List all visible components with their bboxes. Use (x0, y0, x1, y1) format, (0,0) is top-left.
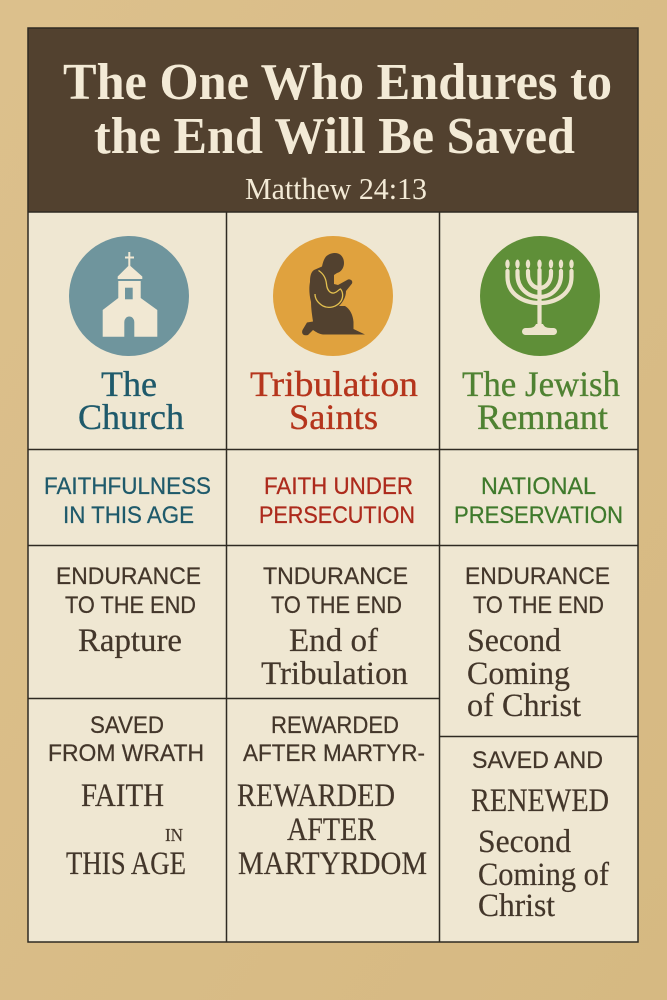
cell: jewish remnant outcome: Coming of (478, 857, 609, 893)
header panel (28, 28, 638, 212)
cell: church outcome (48, 712, 204, 882)
cell: church outcome: FROM WRATH (48, 740, 204, 767)
cell: tribulation saints endurance: TNDURANCE (263, 563, 408, 590)
cell: jewish remnant endurance: TO THE END (473, 592, 604, 619)
group name: The (101, 364, 157, 404)
cell: church outcome: IN (165, 825, 183, 845)
subtitle: scripture reference: Matthew 24:13 (245, 171, 427, 206)
group name: Church (78, 397, 184, 437)
cell: jewish remnant endurance: Second (467, 623, 561, 659)
cell: church outcome: SAVED (90, 712, 164, 739)
cell: jewish remnant outcome: Second (478, 824, 571, 860)
group name: The Jewish (462, 364, 620, 404)
label: faithfulness in this age (44, 473, 211, 529)
cell: tribulation saints endurance: TO THE END (271, 592, 402, 619)
cell: tribulation saints endurance (261, 563, 408, 692)
cell: tribulation saints outcome: MARTYRDOM (238, 846, 427, 882)
cell: jewish remnant outcome: SAVED AND (472, 747, 603, 774)
label: national preservation: NATIONAL (481, 473, 596, 500)
cell: church outcome: FAITH (81, 778, 164, 814)
label: faithfulness in this age: FAITHFULNESS (44, 473, 211, 500)
group name (250, 364, 418, 437)
cell: tribulation saints outcome: AFTER MARTYR- (243, 740, 425, 767)
cell: church outcome: THIS AGE (66, 846, 186, 882)
cell: church endurance: Rapture (78, 623, 182, 659)
title (63, 54, 612, 165)
title: The One Who Endures to (63, 54, 612, 111)
panel: The Church heading (69, 236, 189, 437)
panel: Tribulation Saints heading (250, 236, 418, 437)
icon: kneeling figure in prayer (273, 236, 393, 356)
cell: jewish remnant outcome: RENEWED (471, 783, 609, 819)
label: national preservation (454, 473, 623, 529)
cell: tribulation saints outcome: AFTER (287, 812, 376, 848)
cell: jewish remnant outcome (471, 747, 609, 924)
cell: jewish remnant endurance: of Christ (467, 688, 581, 724)
cell: tribulation saints endurance: End of (289, 623, 378, 659)
cell: jewish remnant outcome: Christ (478, 888, 555, 924)
cell: tribulation saints outcome: REWARDED (237, 778, 395, 814)
label: faith under persecution: PERSECUTION (259, 502, 415, 529)
icon: menorah (480, 236, 600, 356)
label: faithfulness in this age: IN THIS AGE (63, 502, 194, 529)
label: faith under persecution (259, 473, 415, 529)
group name: Saints (289, 397, 378, 437)
cell: church endurance (56, 563, 201, 659)
cell: jewish remnant endurance: ENDURANCE (465, 563, 610, 590)
cell: tribulation saints outcome (237, 712, 427, 882)
group name (462, 364, 620, 437)
cell: church endurance: TO THE END (65, 592, 196, 619)
label: national preservation: PRESERVATION (454, 502, 623, 529)
group name: Tribulation (250, 364, 418, 404)
title: the End Will Be Saved (94, 108, 575, 165)
icon: church (69, 236, 189, 356)
cell: tribulation saints endurance: Tribulation (261, 656, 408, 692)
cell: church endurance: ENDURANCE (56, 563, 201, 590)
group name: Remnant (477, 397, 608, 437)
panel: The Jewish Remnant heading (462, 236, 620, 437)
group name (78, 364, 184, 437)
label: faith under persecution: FAITH UNDER (264, 473, 413, 500)
cell: tribulation saints outcome: REWARDED (271, 712, 399, 739)
cell: jewish remnant endurance (465, 563, 610, 724)
cell: jewish remnant endurance: Coming (467, 656, 570, 692)
